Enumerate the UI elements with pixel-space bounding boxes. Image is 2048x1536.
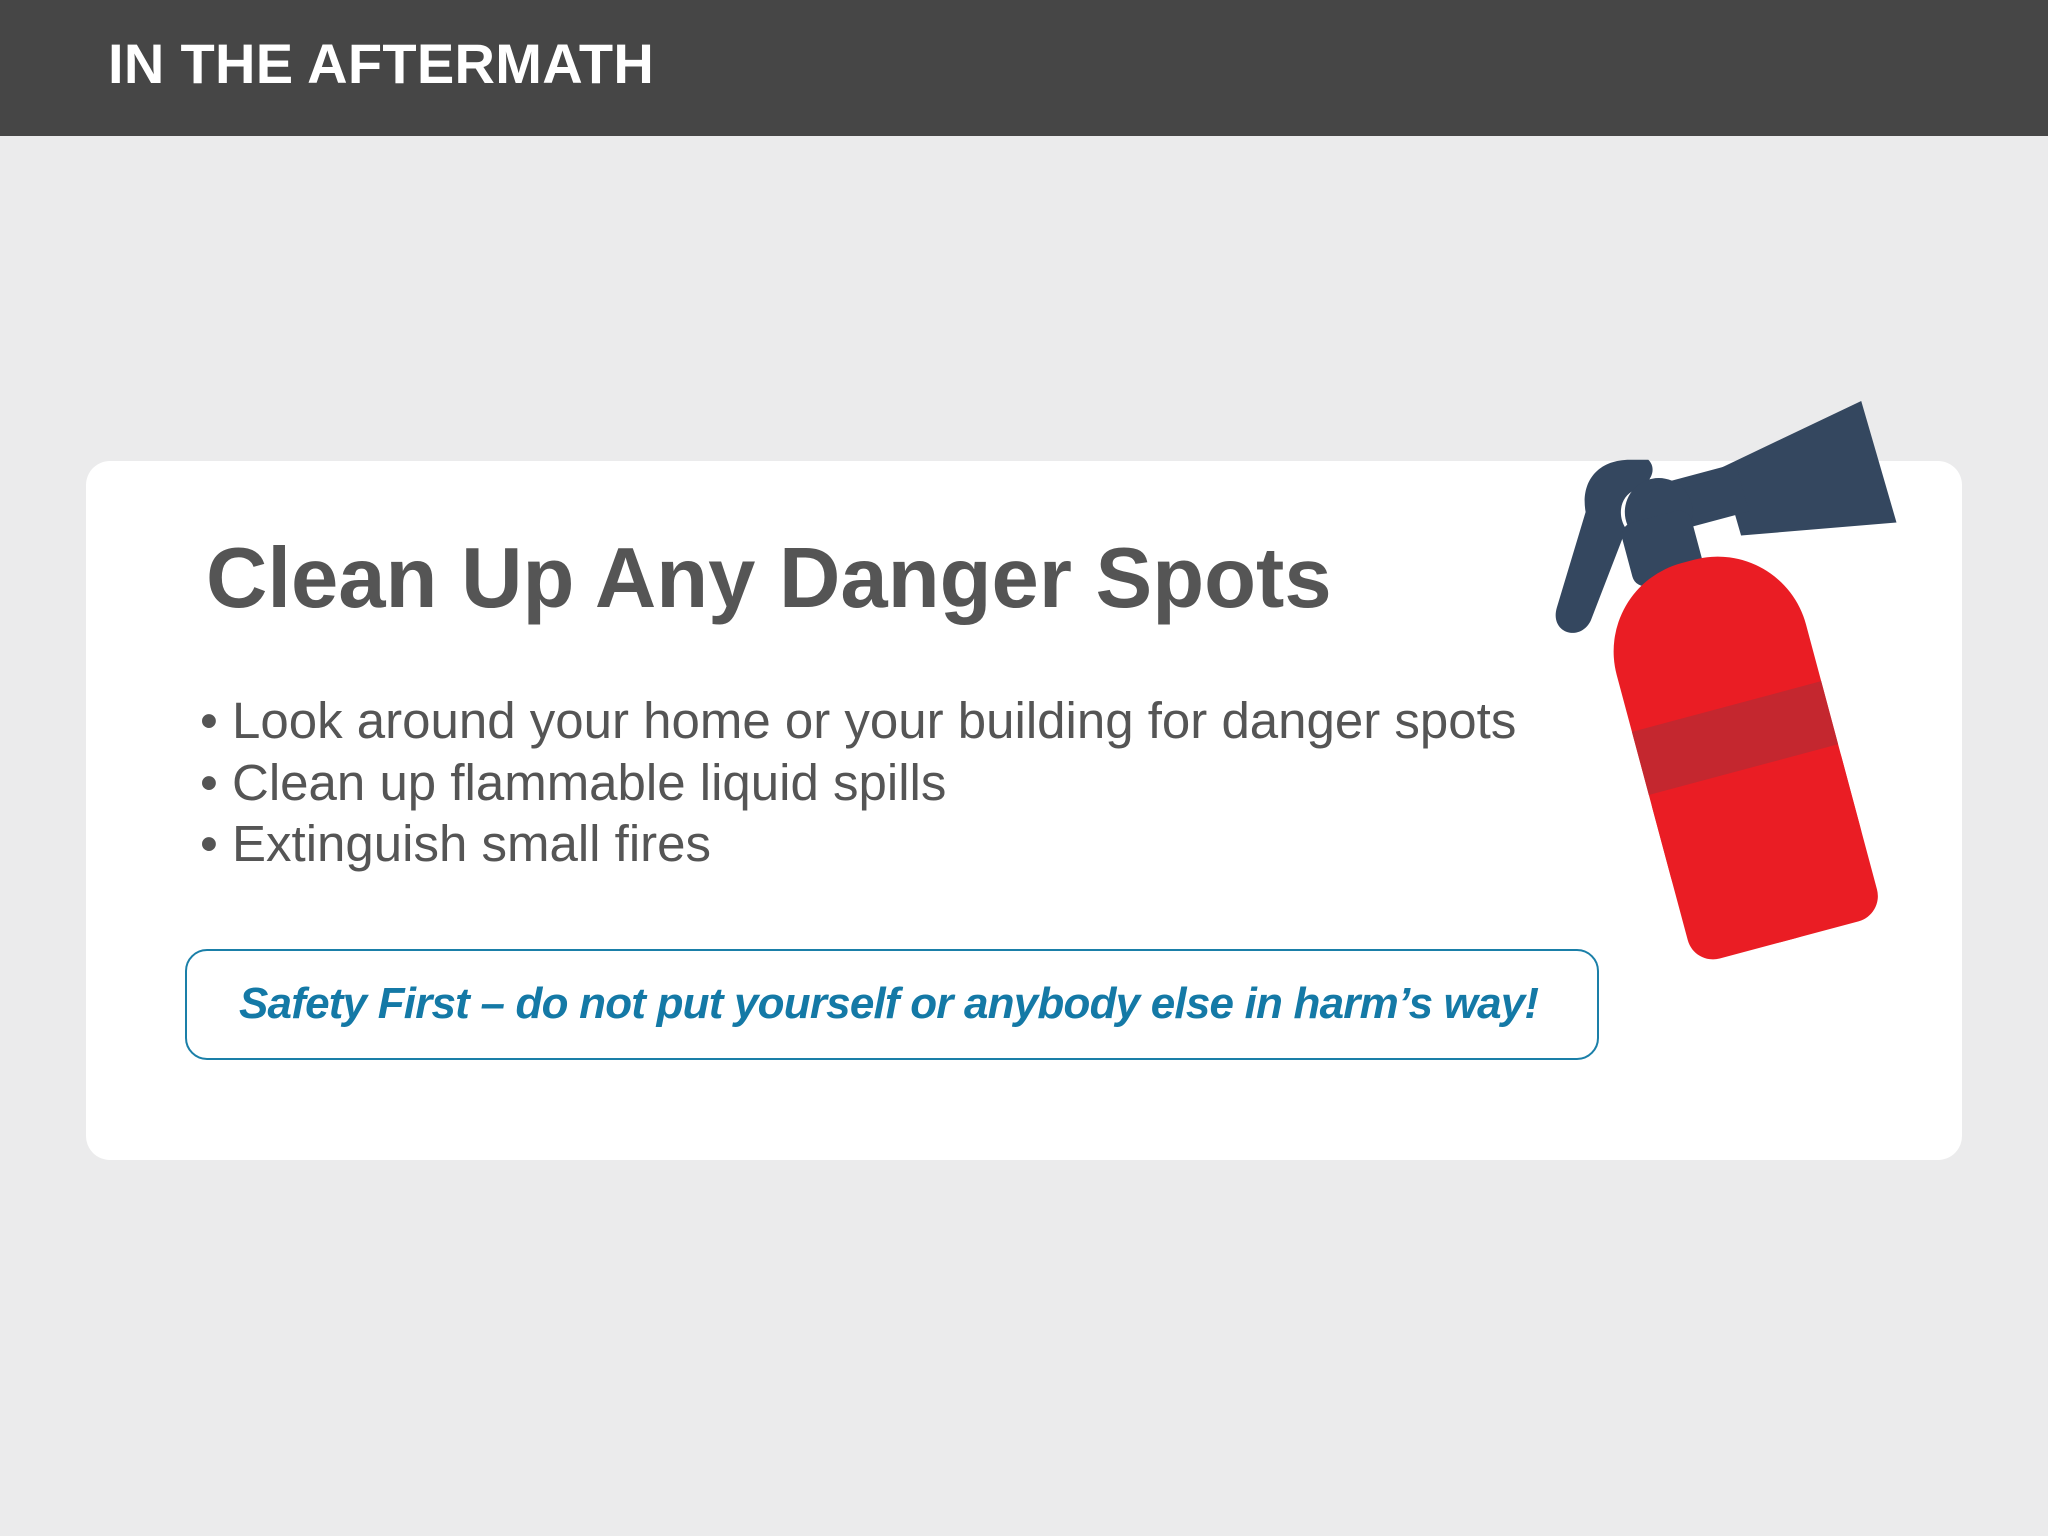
header bar (0, 0, 2048, 136)
bullet list (200, 692, 1516, 872)
callout: safety first (185, 949, 1599, 1060)
header bar: IN THE AFTERMATH (108, 32, 654, 95)
bullet list: • Extinguish small fires (200, 815, 711, 872)
heading: Clean Up Any Danger Spots (206, 531, 1332, 626)
panel: main card (86, 461, 1962, 1160)
callout: safety first: Safety First – do not put yourself or anybody else in harm’s way! (239, 979, 1538, 1028)
bullet list: • Look around your home or your building for danger spots (200, 692, 1516, 749)
bullet list: • Clean up flammable liquid spills (200, 754, 946, 810)
